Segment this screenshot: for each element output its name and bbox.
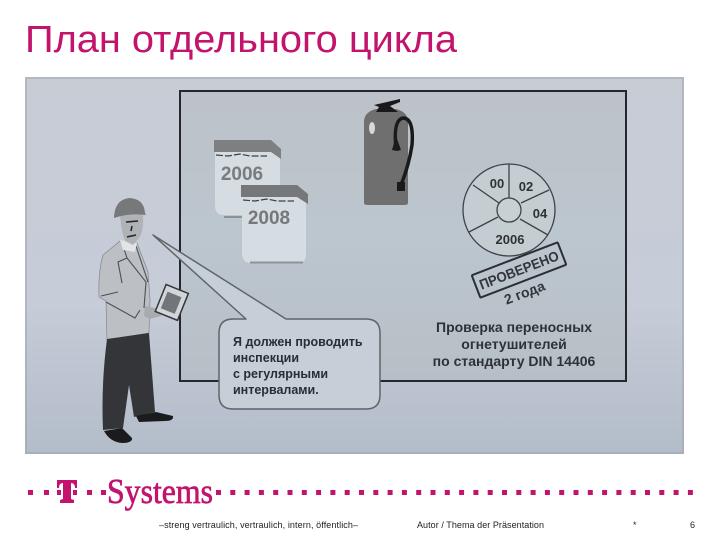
footer: –streng vertraulich, vertraulich, intern, öffentlich– bbox=[159, 520, 358, 530]
icon: calendar 2008 bbox=[224, 185, 308, 263]
clipboard bbox=[155, 285, 188, 320]
collar bbox=[120, 240, 137, 252]
text: standard caption bbox=[433, 319, 596, 369]
hard hat bbox=[114, 198, 146, 218]
text: standard caption: Проверка переносных bbox=[436, 319, 592, 335]
trousers bbox=[102, 333, 155, 430]
callout: speech bubble bbox=[153, 235, 380, 409]
callout: speech bubble: инспекции bbox=[233, 351, 299, 365]
icon: fire extinguisher bbox=[364, 99, 412, 205]
callout: speech bubble: интервалами. bbox=[233, 383, 319, 397]
head bbox=[120, 213, 143, 245]
text: standard caption: по стандарту DIN 14406 bbox=[433, 353, 596, 369]
footer: * bbox=[633, 520, 637, 530]
callout: speech bubble: Я должен проводить bbox=[233, 335, 363, 349]
logo dots, left bbox=[28, 490, 106, 495]
illustration: inspector with clipboard bbox=[99, 198, 188, 443]
text: standard caption: огнетушителей bbox=[461, 336, 567, 352]
panel: photographed illustration bbox=[25, 77, 684, 454]
logo: T-Systems bbox=[28, 472, 693, 511]
icon: calendar 2008: 2008 bbox=[248, 208, 290, 229]
callout: speech bubble: с регулярными bbox=[233, 367, 328, 381]
title: План отдельного цикла bbox=[25, 19, 458, 61]
chart: inspection date wheel: 04 bbox=[533, 206, 548, 221]
footer bbox=[159, 520, 695, 530]
footer: 6 bbox=[690, 520, 695, 530]
logo dotted line bbox=[216, 490, 693, 495]
chart: inspection date wheel: 2006 bbox=[496, 232, 524, 247]
icon: calendar 2006 bbox=[214, 140, 281, 215]
jacket bbox=[99, 241, 150, 340]
icon: calendar 2006: 2006 bbox=[221, 164, 263, 185]
chart: inspection date wheel: 02 bbox=[519, 179, 533, 194]
chart: inspection date wheel bbox=[463, 164, 555, 256]
logo wordmark: Systems bbox=[107, 472, 213, 511]
stamp: checked, 2 years bbox=[472, 242, 573, 315]
chart: inspection date wheel: 00 bbox=[490, 176, 504, 191]
stamp: checked, 2 years: 2 года bbox=[502, 277, 547, 308]
hand bbox=[144, 306, 161, 319]
stamp: checked, 2 years: ПРОВЕРЕНО bbox=[477, 247, 561, 293]
footer: Autor / Thema der Präsentation bbox=[417, 520, 544, 530]
panel: inspection frame bbox=[180, 91, 626, 381]
logo T mark bbox=[57, 480, 77, 503]
shoes bbox=[136, 412, 173, 422]
